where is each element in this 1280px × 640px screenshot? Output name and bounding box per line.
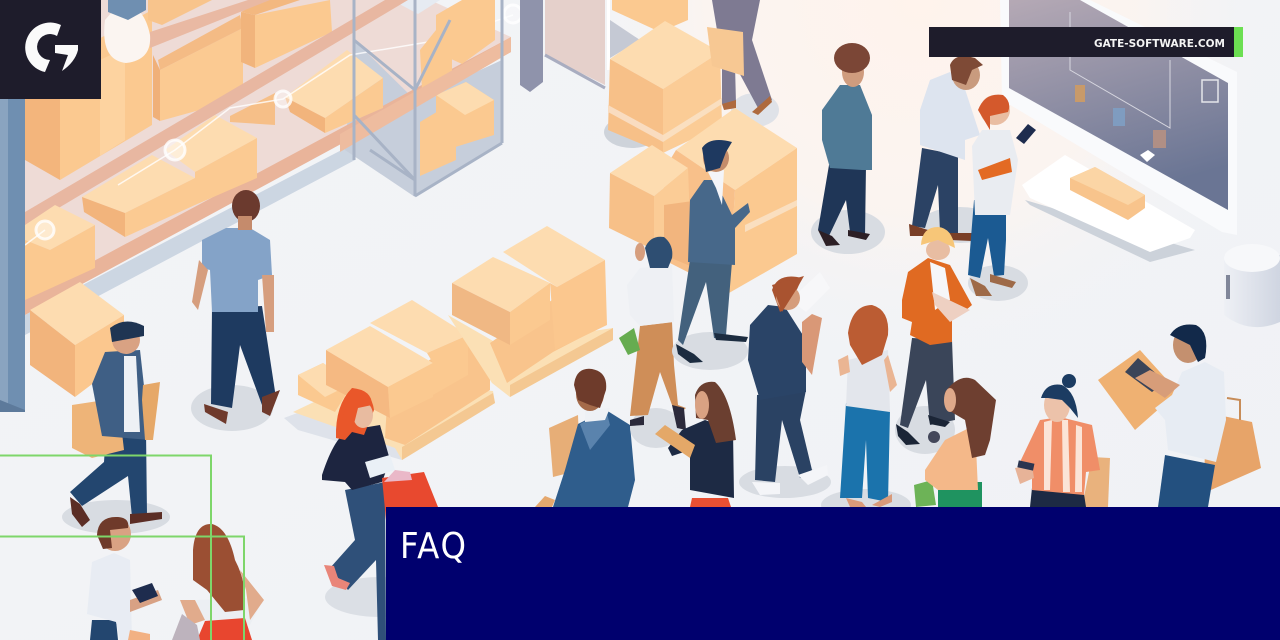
green frame lines — [0, 456, 244, 640]
person: walking man — [191, 190, 280, 431]
person: man with white tablet — [739, 272, 831, 498]
pillar — [0, 98, 25, 412]
monitor display — [1000, 0, 1237, 262]
person: woman in striped shirt — [1015, 374, 1110, 507]
person: woman with wavy hair — [914, 378, 996, 507]
person: woman with blue trousers — [821, 305, 911, 521]
metal rack with boxes — [340, 0, 511, 196]
person: man in white shirt — [87, 517, 162, 640]
person: man in blue jacket — [535, 369, 635, 507]
person: woman with tablet — [655, 382, 736, 507]
website badge — [929, 27, 1243, 57]
shelving unit — [0, 0, 522, 412]
shelf planks — [25, 0, 511, 315]
box: large left shelf — [25, 10, 152, 180]
website badge: GATE-SOFTWARE.COM — [1094, 38, 1225, 50]
box stack back — [604, 0, 722, 153]
hanging lamp — [104, 0, 150, 63]
person: man walking with tan bag, top — [707, 0, 779, 127]
person: man and woman at monitor — [909, 56, 1036, 301]
FAQ panel — [386, 507, 1280, 640]
heading: FAQ — [400, 526, 468, 567]
box: lower left — [25, 205, 124, 397]
top left logo — [0, 0, 101, 99]
pillar and door — [520, 0, 640, 92]
person: worker in orange jacket — [895, 227, 972, 454]
person: woman in white blouse — [619, 237, 686, 448]
pallets and cartons — [284, 226, 613, 460]
person: man with cap and bag — [62, 321, 170, 534]
icon: G bolt mark — [25, 23, 78, 72]
box: shelf middle row — [82, 50, 383, 237]
box: shelf upper row — [148, 0, 332, 121]
cylinder bin — [1224, 244, 1280, 327]
person: woman with long hair — [172, 524, 264, 640]
person: man with tablet and tan bag — [1098, 324, 1261, 507]
person: red-haired woman with bag — [322, 388, 438, 640]
person: man with curly hair — [811, 43, 885, 254]
box stacks centre — [609, 108, 797, 293]
network nodes — [25, 5, 522, 245]
person: man in suit — [672, 140, 750, 370]
